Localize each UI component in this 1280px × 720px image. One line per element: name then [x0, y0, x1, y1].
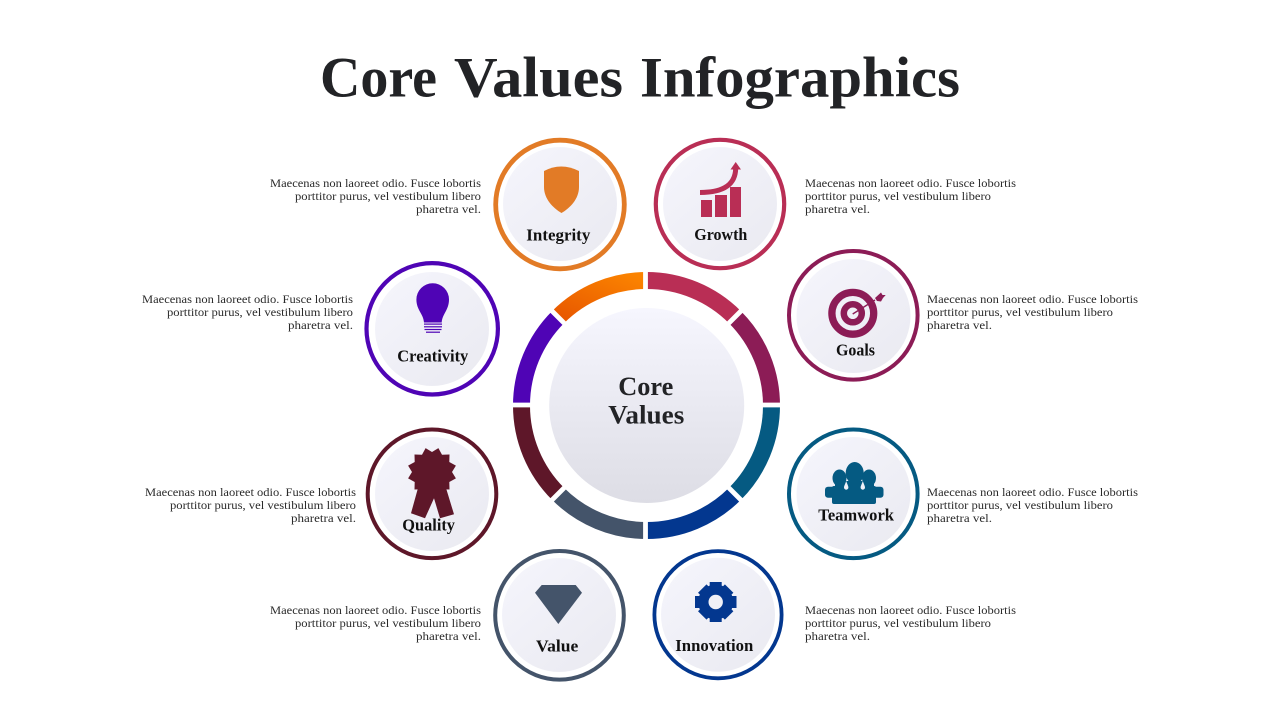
text: growth: Maecenas non laoreet odio. Fusce lobortis — [805, 177, 1017, 190]
center disc — [549, 308, 744, 503]
node: goals: Goals — [836, 341, 876, 360]
text: creativity: porttitor purus, vel vestibulum libero — [167, 306, 353, 319]
text: growth: porttitor purus, vel vestibulum libero — [805, 190, 991, 203]
node: value — [495, 551, 624, 680]
text: quality: pharetra vel. — [291, 512, 356, 525]
ring segment: value — [558, 494, 646, 530]
ring segment: quality — [522, 406, 558, 494]
node: value: Value — [536, 637, 578, 656]
icon: shield — [544, 166, 579, 213]
text: creativity: pharetra vel. — [288, 319, 353, 332]
node: integrity — [496, 140, 624, 269]
text: innovation: Maecenas non laoreet odio. Fusce lobortis — [805, 604, 1017, 617]
icon: rising bars — [700, 162, 741, 217]
center disc: Values — [608, 400, 684, 430]
text: teamwork: Maecenas non laoreet odio. Fusce lobortis — [927, 486, 1139, 499]
ring segment: integrity — [558, 280, 646, 317]
node: innovation: Innovation — [675, 636, 753, 655]
text: quality: Maecenas non laoreet odio. Fusce lobortis — [145, 486, 357, 499]
ring segment: innovation — [646, 494, 735, 530]
node: teamwork — [789, 430, 918, 558]
text: growth: pharetra vel. — [805, 203, 870, 216]
text: goals: pharetra vel. — [927, 319, 992, 332]
ring segment: growth — [646, 280, 735, 317]
node: growth — [656, 140, 784, 268]
text: integrity — [270, 177, 482, 216]
ring segment: teamwork — [735, 406, 772, 494]
title — [320, 46, 960, 110]
ring segment: goals — [735, 317, 772, 406]
text: teamwork: pharetra vel. — [927, 512, 992, 525]
node: creativity — [366, 263, 498, 394]
text: goals: porttitor purus, vel vestibulum libero — [927, 306, 1113, 319]
text: innovation: pharetra vel. — [805, 630, 870, 643]
icon: light bulb — [416, 283, 449, 333]
text: innovation — [805, 604, 1017, 643]
text: quality: porttitor purus, vel vestibulum libero — [170, 499, 356, 512]
central ring — [505, 265, 790, 545]
icon: diamond — [535, 585, 582, 624]
text: teamwork — [927, 486, 1139, 525]
node: creativity: Creativity — [397, 347, 469, 366]
text: value: Maecenas non laoreet odio. Fusce lobortis — [270, 604, 482, 617]
title: Infographics — [640, 46, 960, 110]
text: creativity: Maecenas non laoreet odio. Fusce lobortis — [142, 293, 354, 306]
text: integrity: porttitor purus, vel vestibulum libero — [295, 190, 481, 203]
ring segment: creativity — [522, 317, 558, 406]
text: integrity: pharetra vel. — [416, 203, 481, 216]
text: creativity — [142, 293, 354, 332]
text: value: porttitor purus, vel vestibulum libero — [295, 617, 481, 630]
node: growth: Growth — [694, 225, 747, 244]
text: teamwork: porttitor purus, vel vestibulum libero — [927, 499, 1113, 512]
node: integrity: Integrity — [526, 226, 591, 244]
icon: gear — [695, 582, 736, 622]
icon: target — [832, 292, 886, 334]
node: quality — [368, 430, 496, 558]
text: integrity: Maecenas non laoreet odio. Fusce lobortis — [270, 177, 482, 190]
icon: team — [825, 462, 884, 504]
text: goals — [927, 293, 1139, 332]
title: Values — [454, 46, 623, 110]
title: Core — [320, 46, 437, 110]
text: innovation: porttitor purus, vel vestibulum libero — [805, 617, 991, 630]
node: innovation — [654, 551, 782, 678]
node: goals — [789, 251, 918, 380]
text: goals: Maecenas non laoreet odio. Fusce lobortis — [927, 293, 1139, 306]
icon: rosette — [408, 448, 456, 518]
node: teamwork: Teamwork — [818, 506, 895, 525]
text: value: pharetra vel. — [416, 630, 481, 643]
node: quality: Quality — [402, 516, 456, 535]
text: quality — [145, 486, 357, 525]
center disc: Core — [618, 372, 673, 401]
text: value — [270, 604, 482, 643]
text: growth — [805, 177, 1017, 216]
